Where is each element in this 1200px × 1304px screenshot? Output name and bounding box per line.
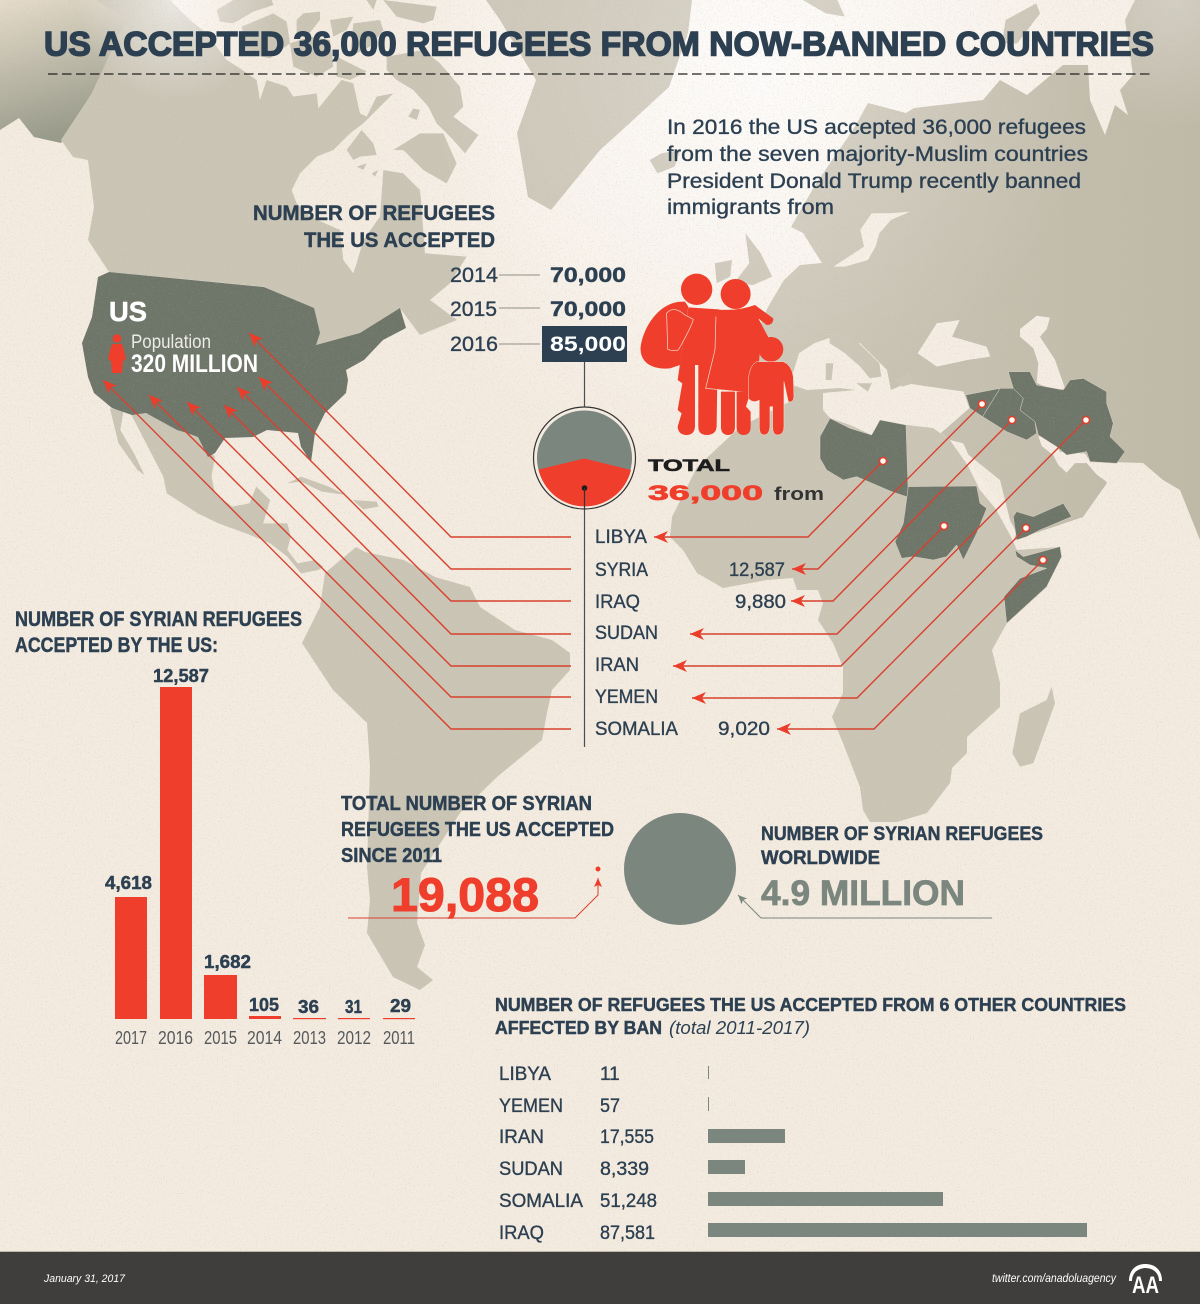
map: Eurasia: [753, 0, 1200, 540]
arrows: banned countries to US: [103, 333, 571, 729]
table: six other countries: 87,581: [600, 1223, 655, 1244]
bar chart: Syrian refugees per year: 31: [345, 996, 362, 1017]
circle: Syrian refugees worldwide: [624, 813, 736, 925]
heading: number of refugees the US accepted: THE US ACCEPTED: [304, 229, 495, 252]
map: Caspian Sea and Persian Gulf: [1020, 316, 1110, 484]
heading: six other countries: (total 2011-2017): [669, 1017, 810, 1038]
total 36,000 from: from: [774, 484, 824, 504]
map: Madagascar: [1012, 687, 1055, 767]
total Syrian refugees accepted since 2011: 19,088: [391, 868, 539, 921]
map: Caribbean islands: [287, 477, 379, 509]
heading: Syrian refugees accepted by the US: NUMBER OF SYRIAN REFUGEES: [15, 608, 302, 631]
map: Libya: [820, 418, 908, 497]
title: US ACCEPTED 36,000 REFUGEES FROM NOW-BANNED COUNTRIES: [44, 26, 1154, 64]
country list with refugee counts: 9,880: [735, 591, 786, 613]
number of Syrian refugees worldwide: NUMBER OF SYRIAN REFUGEES: [761, 823, 1043, 845]
yearly refugee totals: 2015: [450, 298, 497, 321]
icon: Anadolu Agency logo: [1129, 1264, 1162, 1299]
bar chart: Syrian refugees per year: 2012: [337, 1028, 371, 1048]
map: Iran: [1008, 372, 1125, 463]
total Syrian refugees accepted since 2011: SINCE 2011: [341, 845, 442, 867]
table: six other countries: IRAN: [499, 1127, 544, 1148]
map: Italy and Mediterranean islands: [826, 333, 914, 392]
US label and population: 320 MILLION: [131, 350, 258, 378]
number of Syrian refugees worldwide: [738, 823, 1043, 918]
bar chart: Syrian refugees per year: 2015: [204, 1028, 237, 1048]
bar chart: Syrian refugees per year: 2011: [383, 1028, 415, 1048]
table: six other countries: LIBYA: [499, 1064, 551, 1085]
map: Iraq: [983, 388, 1037, 440]
heading: number of refugees the US accepted: NUMBER OF REFUGEES: [253, 202, 495, 225]
bar chart: Syrian refugees per year: 2014: [247, 1028, 282, 1048]
intro paragraph: from the seven majority-Muslim countries: [667, 143, 1088, 166]
footer: January 31, 2017: [43, 1273, 126, 1285]
US label and population: US: [109, 296, 147, 327]
arrows: countries of origin to list: [654, 404, 1086, 729]
yearly refugee totals: 70,000: [550, 264, 626, 287]
background glow: [0, 0, 1200, 480]
map: Canada mainland: [61, 0, 467, 345]
2016 highlighted value: [542, 326, 627, 362]
footer: [0, 1251, 1200, 1304]
pie chart: share of 36,000 in 85,000: [534, 407, 636, 509]
vertical axis line: [584, 362, 586, 747]
total Syrian refugees accepted since 2011: [341, 793, 614, 921]
number of Syrian refugees worldwide: 4.9 MILLION: [761, 874, 965, 913]
table: six other countries: IRAQ: [499, 1223, 544, 1244]
country list with refugee counts: SUDAN: [595, 622, 658, 644]
intro paragraph: President Donald Trump recently banned: [667, 170, 1081, 193]
yearly refugee totals: 2016: [450, 333, 498, 356]
yearly refugee totals: [450, 264, 627, 362]
map: Red Sea: [950, 440, 1017, 540]
bar chart: Syrian refugees per year: 1,682: [204, 951, 251, 972]
number of Syrian refugees worldwide: WORLDWIDE: [761, 847, 880, 869]
country list with refugee counts: SYRIA: [595, 559, 648, 581]
heading: six other countries: AFFECTED BY BAN: [495, 1017, 662, 1038]
footer: twitter.com/anadoluagency: [992, 1273, 1117, 1285]
table: six other countries: YEMEN: [499, 1096, 563, 1117]
map: Greenland: [486, 0, 692, 210]
map: Yemen: [1013, 503, 1072, 540]
country list with refugee counts: IRAQ: [595, 591, 640, 613]
intro paragraph: immigrants from: [667, 196, 834, 219]
country list with refugee counts: 12,587: [729, 559, 785, 581]
bar chart: Syrian refugees per year: 2016: [158, 1028, 193, 1048]
total Syrian refugees accepted since 2011: REFUGEES THE US ACCEPTED: [341, 819, 614, 841]
total 36,000 from: 36,000: [648, 482, 763, 505]
map: northern Europe and Russia islands: [650, 0, 1040, 285]
US label and population: [108, 296, 258, 378]
US label and population: Population: [131, 332, 211, 353]
total 36,000 from: TOTAL: [648, 456, 730, 475]
bar chart: Syrian refugees per year: [105, 665, 415, 1048]
table: six other countries: 17,555: [600, 1127, 654, 1148]
country list with refugee counts: 9,020: [718, 718, 770, 740]
country list with refugee counts: YEMEN: [595, 686, 658, 708]
heading: Syrian refugees accepted by the US: [15, 608, 302, 657]
table: six other countries: 51,248: [600, 1191, 657, 1212]
icon: Anadolu Agency logo: AA: [1132, 1272, 1159, 1299]
icon: person: [108, 334, 126, 373]
country list with refugee counts: IRAN: [595, 654, 639, 676]
table: six other countries: SOMALIA: [499, 1191, 583, 1212]
intro paragraph: In 2016 the US accepted 36,000 refugees: [667, 116, 1086, 139]
table: six other countries: SUDAN: [499, 1159, 563, 1180]
map pins on countries: [879, 400, 1090, 564]
map: Baja California: [110, 408, 144, 475]
map: Sudan: [895, 486, 987, 560]
heading: number of refugees the US accepted: [253, 202, 495, 252]
map: Mediterranean, Baltic and Black Sea: [791, 212, 990, 433]
yearly refugee totals: 70,000: [550, 298, 626, 321]
total 36,000 from: [648, 456, 824, 505]
map: Africa: [670, 385, 1060, 822]
intro paragraph: [667, 116, 1088, 219]
table: six other countries: 8,339: [600, 1159, 649, 1180]
table: six other countries: 57: [600, 1096, 620, 1117]
heading: Syrian refugees accepted by the US: ACCEPTED BY THE US:: [15, 634, 218, 657]
map: highlighted banned countries: [820, 372, 1125, 623]
map: Alaska: [0, 0, 126, 143]
yearly refugee totals: 85,000: [550, 333, 626, 356]
bar chart: Syrian refugees per year: 4,618: [105, 872, 152, 893]
map: United States highlighted: [82, 272, 406, 462]
bar chart: Syrian refugees per year: 105: [249, 994, 279, 1015]
icon: refugee family: [641, 274, 794, 435]
yearly refugee totals: 2014: [450, 264, 498, 287]
bar chart: Syrian refugees per year: 12,587: [153, 665, 209, 686]
bar chart: Syrian refugees per year: 2013: [293, 1028, 326, 1048]
map: South America: [302, 547, 570, 990]
bar chart: Syrian refugees per year: 36: [298, 996, 319, 1017]
table: six other countries: [499, 1064, 1087, 1244]
bar chart: Syrian refugees per year: 29: [390, 995, 411, 1016]
bar chart: Syrian refugees per year: 2017: [115, 1028, 147, 1048]
map: Mexico and Central America: [131, 413, 323, 573]
map: Somalia: [1004, 547, 1062, 623]
heading: six other countries: [495, 994, 1126, 1038]
country list with refugee counts: SOMALIA: [595, 718, 678, 740]
map: Syria: [966, 388, 1000, 417]
map: light overlays: [0, 0, 1200, 420]
country list with refugee counts: LIBYA: [595, 526, 647, 548]
heading: six other countries: NUMBER OF REFUGEES THE US ACCEPTED FROM 6 OTHER COUNTRIES: [495, 994, 1126, 1015]
total Syrian refugees accepted since 2011: TOTAL NUMBER OF SYRIAN: [341, 793, 592, 815]
table: six other countries: 11: [600, 1064, 620, 1085]
country list with refugee counts: [595, 526, 786, 740]
map: Canadian Arctic islands: [217, 0, 478, 183]
